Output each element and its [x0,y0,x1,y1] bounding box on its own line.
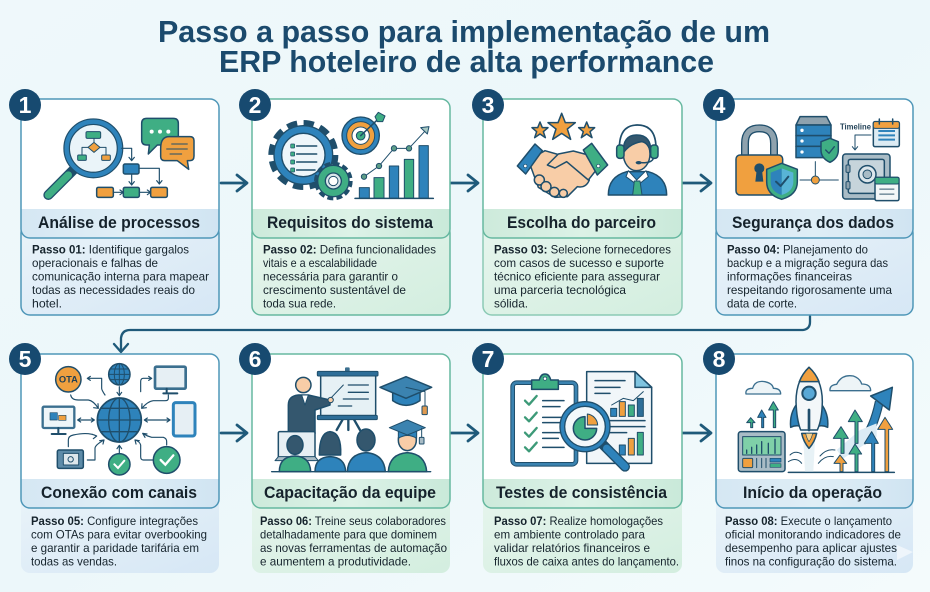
text block: step 3 [494,242,671,310]
text block: step 2: vitais e a escalabilidade [263,256,377,270]
badge: 5 [9,343,41,375]
text block: step 6 [260,514,447,568]
icon: channel connections: OTA [59,375,78,385]
text block: step 4 [727,242,892,310]
text block: step 6: e aumentem a produtividade. [260,554,411,568]
heading: Requisitos do sistema: Requisitos do sistema [267,213,434,232]
text block: step 3: sólida. [494,296,528,310]
badge: 6: 6 [249,346,261,372]
arrow: connector from step 4 to 5 [114,316,810,352]
badge: 6 [239,343,271,375]
text block: step 2: crescimento sustentável de [263,283,406,297]
badge: 7 [472,343,504,375]
title [158,15,770,79]
text block: step 3: com casos de sucesso e suporte [494,256,664,270]
icon: channel connections [42,362,196,476]
heading: Análise de processos: Análise de processos [38,213,200,232]
text block: step 5: com OTAs para evitar overbooking [31,528,207,542]
text block: step 5: todas as vendas. [31,554,117,568]
text block: step 8: Passo 08: Execute o lançamento [725,514,892,528]
text block: step 4: respeitando rigorosamente uma [727,283,892,297]
text block: step 1: comunicação interna para mapear [32,270,209,284]
text block: step 8: finos na configuração do sistema. [725,554,897,568]
text block: step 1 [32,242,209,310]
arrow: step 2 to 3 [451,175,478,191]
text block: step 8: oficial monitorando indicadores de [725,528,901,542]
text block: step 3: uma parceria tecnológica [494,283,626,297]
badge: 2 [239,89,271,121]
arrow: step 7 to 8 [683,425,711,441]
text block: step 7: validar relatórios financeiros e [494,541,650,555]
icon: data security [735,116,900,202]
badge: 3: 3 [482,92,494,118]
icon: data security: Timeline [840,122,872,131]
text block: step 7 [494,514,679,568]
badge: 8 [703,343,735,375]
text block: step 5: e garantir a paridade tarifária em [31,541,199,555]
badge: 2: 2 [249,92,261,118]
text block: step 7: Passo 07: Realize homologações [494,514,663,528]
panel: step 1 [9,89,219,315]
arrow: step 5 to 6 [221,425,247,441]
icon: operation launch rocket [738,366,896,474]
heading: Testes de consistência: Testes de consistência [496,483,668,502]
text block: step 4: informações financeiras [727,270,852,284]
text block: step 8: desempenho para aplicar ajustes [725,541,897,555]
text block: step 2: toda sua rede. [263,296,336,310]
text block: step 6: Passo 06: Treine seus colaboradores [260,514,446,528]
text block: step 8 [725,514,901,568]
text block: step 1: todas as necessidades reais do [32,283,195,297]
heading: Escolha do parceiro: Escolha do parceiro [507,213,656,232]
icon: system requirements [268,112,434,200]
text block: step 2: Passo 02: Defina funcionalidades [263,242,436,256]
badge: 5: 5 [19,346,32,372]
text block: step 1: operacionais e falhas de [32,256,158,270]
badge: 4: 4 [713,92,726,118]
heading: Segurança dos dados: Segurança dos dados [732,213,894,232]
badge: 1: 1 [19,92,32,118]
heading: Capacitação da equipe: Capacitação da equipe [264,483,436,502]
text block: step 3: técnico eficiente para assegurar [494,270,660,284]
panel: step 6 [239,343,450,573]
text block: step 5: Passo 05: Configure integrações [31,514,198,528]
text block: step 3: Passo 03: Selecione fornecedores [494,242,671,256]
text block: step 4: backup e a migração segura das [727,256,888,270]
text block: step 2: necessária para garantir o [263,270,398,284]
badge: 8: 8 [713,346,726,372]
icon: partner handshake and support agent [516,112,668,198]
panel: step 3 [472,89,682,315]
icon: team training [270,367,432,472]
title: Passo a passo para implementação de um [158,15,770,49]
text block: step 6: as novas ferramentas de automação [260,541,447,555]
icon: consistency tests [510,370,652,472]
badge: 7: 7 [482,346,494,372]
badge: 4 [703,89,735,121]
text block: step 7: fluxos de caixa antes do lançamento. [494,554,679,568]
badge: 1 [9,89,41,121]
arrow: step 3 to 4 [683,175,711,191]
arrow: step 6 to 7 [451,425,478,441]
text block: step 1: hotel. [32,296,62,310]
panel: step 7 [472,343,682,573]
text block: step 6: detalhadamente para que dominem [260,528,437,542]
panel: step 2 [239,89,450,315]
heading: Conexão com canais: Conexão com canais [41,483,197,502]
text block: step 7: em ambiente controlado para [494,528,645,542]
arrow: step 1 to 2 [221,175,247,191]
text block: step 2 [263,242,436,310]
icon: process analysis [43,118,195,200]
panel: step 4 [703,89,913,315]
title: ERP hoteleiro de alta performance [219,45,714,79]
text block: step 4: data de corte. [727,296,797,310]
text block: step 4: Passo 04: Planejamento do [727,242,868,256]
text block: step 5 [31,514,207,568]
badge: 3 [472,89,504,121]
text block: step 1: Passo 01: Identifique gargalos [32,242,189,256]
panel: step 8 [703,343,913,573]
panel: step 5 [9,343,219,573]
heading: Início da operação: Início da operação [743,483,882,502]
